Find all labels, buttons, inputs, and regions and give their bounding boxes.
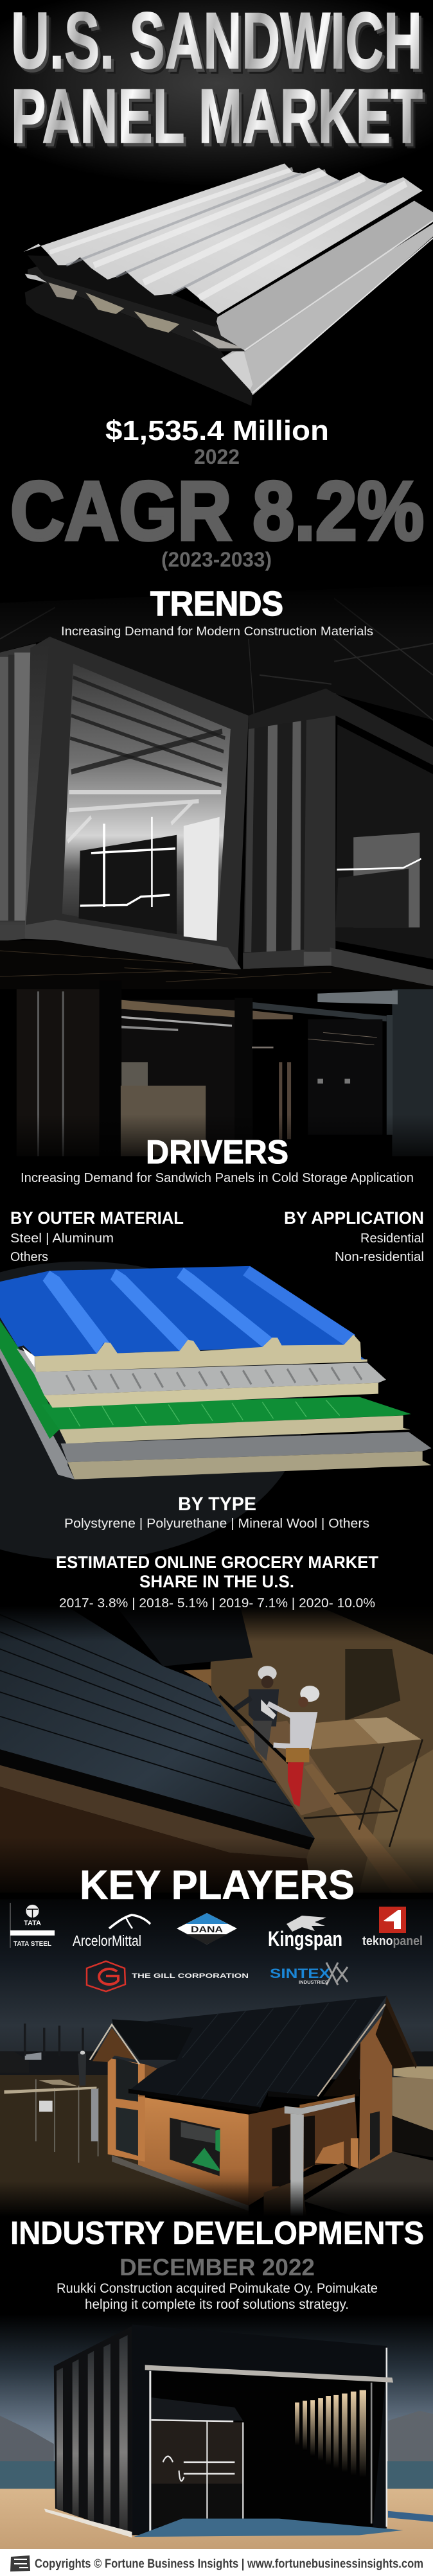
segment: by outer material <box>10 1208 184 1264</box>
lower level column and door <box>234 998 293 1156</box>
segment: by application: Residential <box>360 1231 424 1246</box>
front window <box>170 2118 220 2176</box>
lower level left <box>17 981 121 1156</box>
green panel <box>0 1321 411 1443</box>
logo: ArcelorMittal: ArcelorMittal <box>73 1932 141 1949</box>
front wall <box>138 2096 249 2208</box>
deck <box>304 2150 433 2216</box>
left container wall <box>0 644 36 941</box>
segment: by application: BY APPLICATION <box>284 1208 424 1228</box>
tree line <box>0 2024 433 2077</box>
middle sheet <box>25 201 433 351</box>
main roof <box>0 1606 315 1839</box>
online grocery heading: SHARE IN THE U.S. <box>139 1572 294 1591</box>
logo: Dana: DANA <box>191 1924 223 1934</box>
development text <box>57 2281 378 2312</box>
title glow <box>0 0 433 186</box>
logo: Dana <box>177 1913 237 1945</box>
online grocery heading: ESTIMATED ONLINE GROCERY MARKET <box>56 1553 378 1572</box>
logo: Teknopanel: teknopanel <box>362 1934 423 1948</box>
roof photo bottom fade <box>0 1837 433 1901</box>
gutters <box>128 2089 317 2112</box>
drivers text: Increasing Demand for Sandwich Panels in Cold Storage Application <box>21 1171 414 1185</box>
soffit <box>0 1786 312 1892</box>
right post and beam <box>304 693 335 964</box>
blue floor <box>134 2519 403 2537</box>
lower level right <box>252 989 433 1156</box>
worker right <box>261 1686 319 1807</box>
blue panel cream core <box>35 1334 367 1372</box>
ground left <box>0 2075 249 2216</box>
shed opening <box>150 2371 385 2527</box>
roof workers photo <box>0 1606 433 1892</box>
logo: The Gill Corporation: THE GILL CORPORATION <box>132 1973 249 1980</box>
grey bottom panel <box>0 1336 431 1479</box>
development text: helping it complete its roof solutions strategy. <box>85 2297 349 2312</box>
worker left <box>234 1666 279 1761</box>
footer bar <box>0 2549 433 2576</box>
dormer gable <box>93 2028 137 2062</box>
scaffold deck <box>240 1717 423 1892</box>
by type heading: BY TYPE <box>178 1494 256 1515</box>
canopy bar <box>145 2365 393 2383</box>
lower level interior <box>121 1000 234 1156</box>
logo: Tata Steel: TATA <box>24 1919 41 1927</box>
deck step <box>264 2163 348 2216</box>
shed scene <box>0 2315 433 2550</box>
porch beam <box>285 2094 355 2115</box>
floor grid <box>0 940 433 989</box>
corrugated grey panel <box>17 1348 386 1407</box>
house fade <box>0 2181 433 2216</box>
porch column <box>290 2114 304 2216</box>
logo: ArcelorMittal <box>73 1915 150 1949</box>
right window <box>335 725 433 959</box>
lit wall bars <box>295 2390 366 2478</box>
water <box>0 2461 433 2489</box>
trends heading: TRENDS <box>150 585 283 623</box>
gutter and fascia <box>0 1749 315 1849</box>
top sheet <box>24 163 423 327</box>
online grocery data: 2017- 3.8% | 2018- 5.1% | 2019- 7.1% | 2020- 10.0% <box>59 1596 375 1610</box>
roof photo top fade <box>0 1606 433 1641</box>
container base <box>0 920 433 986</box>
window frame <box>25 637 249 968</box>
footer logo <box>10 2555 30 2572</box>
market value: $1,535.4 Million <box>105 415 329 446</box>
development text: Ruukki Construction acquired Poimukate Oy. Poimukate <box>57 2281 378 2296</box>
window frames <box>150 2348 387 2534</box>
sky <box>0 2315 433 2464</box>
window interior <box>62 664 231 941</box>
sunlit patches <box>315 2138 358 2168</box>
side wall <box>249 2096 359 2205</box>
night sky <box>0 1900 433 2079</box>
logo: Tata Steel: TATA STEEL <box>13 1941 51 1948</box>
segment: by application <box>284 1208 424 1264</box>
logo: Kingspan <box>268 1916 342 1950</box>
logo: Teknopanel <box>362 1907 423 1948</box>
drivers heading: DRIVERS <box>146 1134 288 1171</box>
logo: Kingspan: Kingspan <box>268 1927 342 1950</box>
trends text: Increasing Demand for Modern Construction Materials <box>61 625 373 639</box>
title <box>11 0 423 159</box>
dormer trim <box>90 2025 139 2064</box>
year: 2022 <box>194 445 240 468</box>
trends photo: lower level <box>0 920 433 1156</box>
upper roof <box>116 1606 252 1666</box>
sandwich panel stack illustration <box>0 1262 431 1560</box>
corner post <box>25 637 55 939</box>
mountains <box>0 2411 433 2462</box>
side doors and window <box>272 2112 380 2186</box>
shed side wall <box>44 2326 132 2537</box>
forecast period: (2023-2033) <box>161 548 272 571</box>
ground right <box>392 2077 433 2131</box>
logo: Sintex <box>270 1963 348 1985</box>
logo: The Gill Corporation <box>87 1961 249 1991</box>
wing windows <box>116 2058 138 2156</box>
by type list: Polystyrene | Polyurethane | Mineral Wool | Others <box>64 1517 369 1531</box>
main roof <box>130 1996 417 2109</box>
segment: by outer material: BY OUTER MATERIAL <box>10 1208 184 1228</box>
wing wall <box>108 2058 145 2162</box>
metal panels illustration <box>24 163 433 406</box>
logo: Sintex: INDUSTRIES <box>299 1981 328 1985</box>
logo: Sintex: SINTEX <box>270 1966 330 1981</box>
shed front wall <box>132 2324 387 2535</box>
bottom sheet <box>25 224 433 406</box>
house photo <box>0 1900 433 2216</box>
scaffold <box>4 2051 98 2163</box>
trends photo fades <box>0 581 433 1169</box>
key players heading: KEY PLAYERS <box>80 1862 355 1908</box>
logo: Tata Steel <box>10 1903 55 1948</box>
ground <box>210 1606 433 1892</box>
sand <box>0 2489 433 2550</box>
segment: by outer material: Steel | Aluminum <box>10 1231 114 1246</box>
gutter pipe <box>220 1697 293 1767</box>
backdrop <box>0 1262 304 1560</box>
segment: by application: Non-residential <box>335 1250 424 1264</box>
segment: by outer material: Others <box>10 1250 48 1264</box>
development date: DECEMBER 2022 <box>119 2254 315 2280</box>
gable shade <box>376 2002 416 2069</box>
online grocery heading <box>56 1553 378 1591</box>
trends photo: containers <box>0 585 433 968</box>
foundation <box>112 2155 249 2211</box>
blue top panel <box>0 1266 367 1367</box>
right container wall <box>243 702 308 955</box>
dormer roof <box>112 2019 193 2060</box>
roof mesh <box>0 585 433 720</box>
